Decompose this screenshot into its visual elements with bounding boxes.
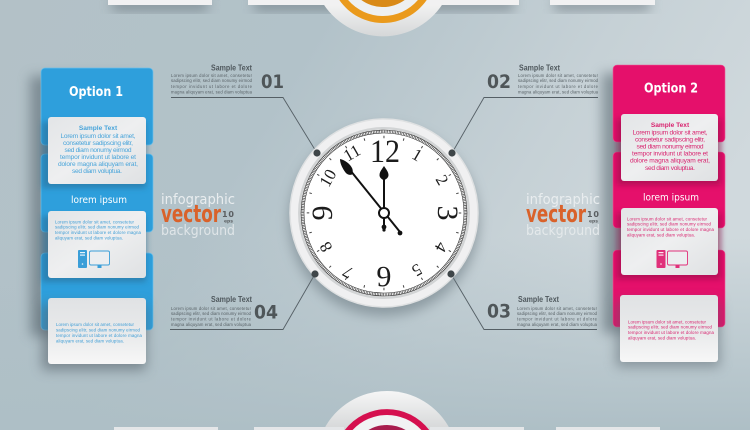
- panel: option 2: [602, 65, 725, 367]
- watermark: infographic vector left: background: [161, 223, 235, 239]
- callout 04: sadipscing elitr, sed diam nonumy eirmod: [171, 311, 252, 316]
- watermark: infographic vector left: eps: [224, 220, 233, 224]
- label: lorem ipsum: lorem ipsum: [643, 192, 699, 204]
- card: sample text: sed diam nonumy eirmod: [636, 144, 704, 150]
- clock numerals: 4: [430, 239, 451, 256]
- card: lower text: aliquyam erat, sed diam voluptua.: [56, 338, 124, 344]
- callout 02: magna aliquyam erat, sed diam voluptua: [518, 90, 599, 94]
- clock numerals: 1: [409, 145, 425, 165]
- card: lower text: tempor invidunt ut labore et dolore magna: [56, 333, 143, 338]
- clock: [289, 119, 479, 316]
- card: lower text: [42, 298, 146, 370]
- watermark: infographic vector right: eps: [589, 220, 598, 224]
- callout 04: magna aliquyam erat, sed diam voluptua: [171, 322, 252, 327]
- clock numerals: 12: [370, 134, 400, 170]
- callout 02: Lorem ipsum dolor sit amet, consetetur: [518, 73, 599, 78]
- card: sample text: [42, 117, 146, 188]
- callout 03: Lorem ipsum dolor sit amet, consetetur: [517, 306, 598, 311]
- callout 02: Sample Text: [519, 64, 560, 72]
- watermark: infographic vector right: 10: [587, 210, 599, 219]
- callout 01: tempor invidunt ut labore et dolore: [171, 84, 253, 89]
- clock numerals: 2: [432, 172, 452, 188]
- callout 03: Sample Text: [518, 295, 559, 304]
- card: lower text: Lorem ipsum dolor sit amet, consetetur: [628, 320, 707, 324]
- icon: computer: [78, 250, 110, 268]
- card: text with computer icon: aliquyam erat, sed diam voluptua.: [627, 232, 695, 238]
- clock numerals: [306, 134, 464, 293]
- card: text with computer icon: tempor invidunt ut labore et dolore magna: [627, 227, 715, 232]
- card: lower text: [616, 295, 720, 367]
- watermark: infographic vector left: [161, 192, 235, 239]
- card: sample text: sed diam nonumy eirmod: [64, 147, 132, 154]
- card: text with computer icon: [617, 208, 721, 279]
- watermark: infographic vector right: [526, 192, 600, 239]
- callout 01: sadipscing elitr, sed diam nonumy eirmod: [171, 78, 253, 83]
- card: sample text: dolore magna aliquyam erat,: [58, 161, 138, 168]
- clock numerals: 9: [306, 206, 339, 220]
- callout 04: Sample Text: [211, 295, 252, 304]
- clock hands: [340, 159, 402, 235]
- callout 03: [451, 274, 598, 330]
- callout 02: [452, 64, 599, 153]
- watermark: infographic vector left: infographic: [161, 192, 235, 208]
- clock numerals: 5: [409, 260, 425, 280]
- card: sample text: consetetur sadipscing elitr,: [635, 136, 705, 144]
- heading: option 1: Option 1: [69, 85, 123, 100]
- callout 03: magna aliquyam erat, sed diam voluptua: [517, 322, 598, 327]
- card: text with computer icon: Lorem ipsum dolor sit amet, consetetur: [55, 220, 135, 224]
- clock numerals: 6: [376, 260, 392, 293]
- card: sample text: Sample Text: [651, 122, 690, 129]
- card: text with computer icon: [42, 211, 146, 282]
- callout connector dots: [311, 149, 456, 278]
- card: lower text: sadipscing elitr, sed diam nonumy eirmod: [56, 328, 141, 332]
- card: sample text: Lorem ipsum dolor sit amet,: [60, 133, 136, 140]
- callout 04: Lorem ipsum dolor sit amet, consetetur: [171, 306, 252, 311]
- callout 04: [170, 274, 315, 330]
- label: lorem ipsum: lorem ipsum: [71, 195, 127, 206]
- card: sample text: [617, 114, 721, 185]
- callout 02: tempor invidunt ut labore et dolore: [518, 84, 599, 89]
- watermark: infographic vector left: vector: [161, 200, 221, 228]
- callout 01: Lorem ipsum dolor sit amet, consetetur: [171, 73, 253, 78]
- callout 01: Sample Text: [211, 64, 252, 72]
- watermark: infographic vector right: background: [526, 223, 600, 239]
- card: sample text: tempor invidunt ut labore et: [632, 150, 708, 158]
- card: sample text: Lorem ipsum dolor sit amet,: [632, 130, 708, 136]
- panel: option 1: [30, 68, 153, 370]
- clock numerals: 7: [339, 261, 356, 282]
- card: text with computer icon: tempor invidunt ut labore et dolore magna: [55, 230, 142, 235]
- card: lower text: aliquyam erat, sed diam voluptua.: [628, 336, 696, 340]
- card: text with computer icon: aliquyam erat, sed diam voluptua.: [55, 236, 123, 240]
- card: sample text: sed diam voluptua.: [72, 168, 122, 175]
- watermark: infographic vector right: vector: [526, 200, 586, 228]
- heading: option 2: Option 2: [644, 82, 698, 96]
- clock numerals: 11: [340, 141, 364, 165]
- card: text with computer icon: sadipscing elitr, sed diam nonumy eirmod: [627, 222, 712, 226]
- top decoration: cards and orange circle: [108, 0, 655, 36]
- icon: computer: [656, 250, 688, 268]
- card: sample text: tempor invidunt ut labore et: [60, 154, 136, 161]
- callout 04: tempor invidunt ut labore et dolore: [171, 316, 252, 322]
- card: sample text: consetetur sadipscing elitr,: [63, 140, 133, 147]
- card: text with computer icon: sadipscing elitr, sed diam nonumy eirmod: [55, 224, 140, 230]
- watermark: infographic vector left: 10: [222, 210, 234, 219]
- bottom decoration: cards and crimson circle: [114, 391, 660, 430]
- clock numerals: 3: [431, 206, 464, 220]
- callout 01: magna aliquyam erat, sed diam voluptua: [171, 90, 253, 94]
- watermark: infographic vector right: infographic: [526, 192, 600, 208]
- callout 02: sadipscing elitr, sed diam nonumy eirmod: [518, 78, 599, 83]
- card: text with computer icon: Lorem ipsum dolor sit amet, consetetur: [627, 216, 708, 222]
- clock numerals: 8: [316, 239, 336, 255]
- card: lower text: sadipscing elitr, sed diam nonumy eirmod: [628, 324, 713, 330]
- card: lower text: tempor invidunt ut labore et dolore magna: [628, 330, 715, 335]
- callout 03: 03: [487, 300, 511, 322]
- card: lower text: Lorem ipsum dolor sit amet, consetetur: [56, 322, 135, 327]
- callout 01: 01: [261, 71, 284, 93]
- callout 02: 02: [487, 71, 511, 93]
- callout 03: tempor invidunt ut labore et dolore: [517, 316, 598, 322]
- card: sample text: sed diam voluptua.: [645, 165, 695, 172]
- callout 01: [171, 64, 317, 153]
- card: sample text: dolore magna aliquyam erat,: [630, 158, 710, 164]
- card: sample text: Sample Text: [79, 125, 118, 132]
- clock numerals: 10: [316, 166, 340, 190]
- callout 03: sadipscing elitr, sed diam nonumy eirmod: [517, 311, 598, 316]
- callout 04: 04: [254, 302, 278, 324]
